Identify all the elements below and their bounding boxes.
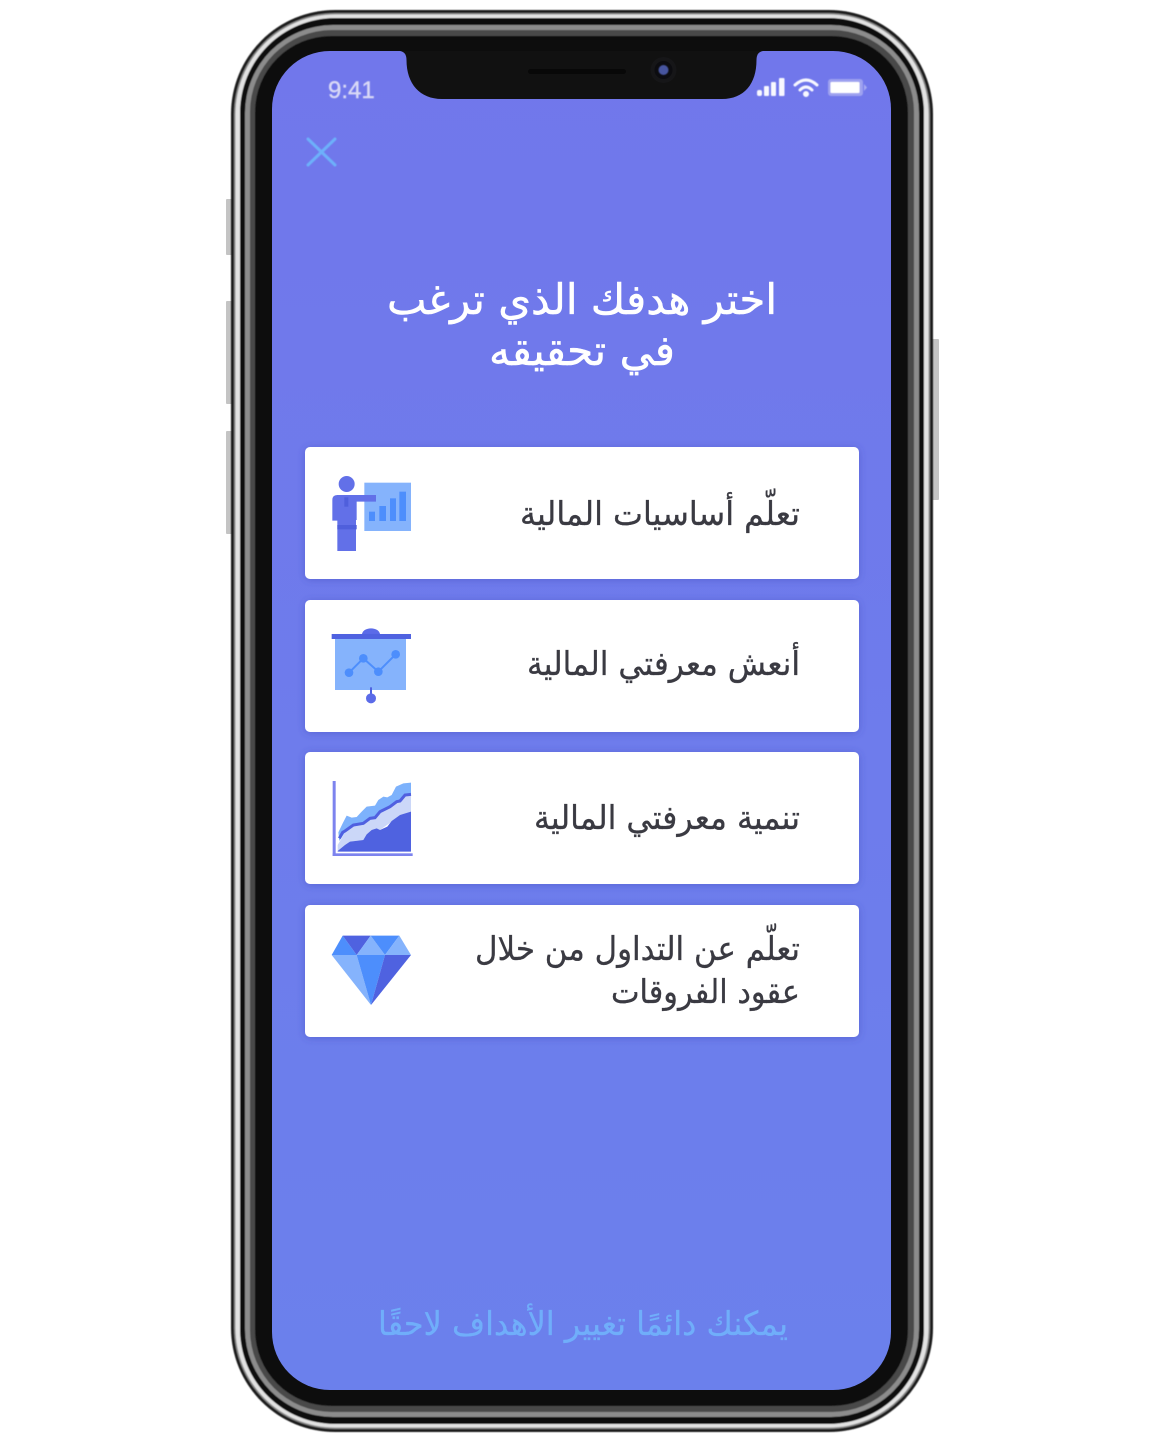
footer note: يمكنك دائمًا تغيير الأهداف لاحقًا (378, 1303, 788, 1343)
label: trading (475, 924, 800, 1011)
icon: close (308, 139, 335, 165)
icon: presentation board (332, 628, 411, 703)
side buttons (226, 199, 939, 534)
title (387, 275, 777, 376)
label: trading: عقود الفروقات (611, 972, 800, 1011)
camera (650, 57, 676, 83)
label: basics: تعلّم أساسيات المالية (520, 489, 800, 533)
icon: battery (828, 79, 867, 96)
card: trading (305, 905, 859, 1037)
screen (272, 51, 891, 1390)
title: اختر هدفك الذي ترغب (387, 275, 777, 324)
icon: signal (757, 78, 784, 96)
icon: diamond (332, 936, 411, 1005)
icon: growth area chart (333, 781, 413, 856)
label: develop: تنمية معرفتي المالية (534, 798, 800, 837)
notch (400, 51, 763, 99)
status time: 9:41 (328, 77, 375, 104)
label: trading: تعلّم عن التداول من خلال (475, 924, 800, 968)
title: في تحقيقه (489, 326, 675, 376)
card: basics (305, 447, 859, 579)
card: refresh (305, 600, 859, 732)
icon: presenter with bar chart (332, 476, 411, 551)
phone frame (231, 10, 933, 1432)
icon: wifi (795, 80, 817, 96)
label: refresh: أنعش معرفتي المالية (527, 642, 800, 683)
speaker (528, 69, 626, 74)
card: develop (305, 752, 859, 884)
